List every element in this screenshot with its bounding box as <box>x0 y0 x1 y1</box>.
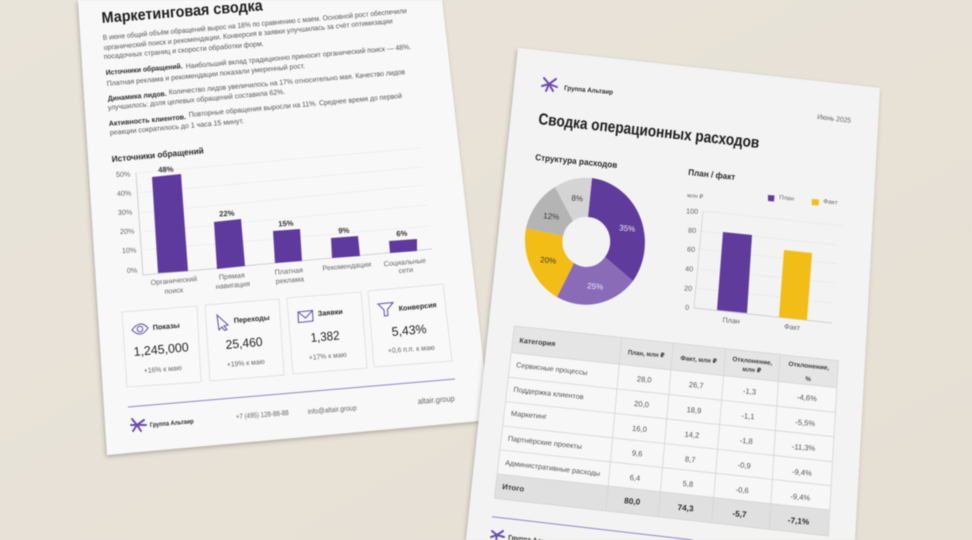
panel: marketing summary sheet <box>78 0 490 455</box>
chart heading: plan vs fact: План / факт <box>688 167 736 182</box>
bar chart: sources of requests: 40% <box>117 188 132 198</box>
bar chart: sources of requests: Социальные <box>383 256 426 268</box>
text block: summary paragraphs: посадочных страниц и скорости обработки форм. <box>103 39 264 61</box>
table: expense breakdown: % <box>805 376 812 383</box>
text block: summary paragraphs: Источники обращений. <box>105 61 183 77</box>
card: conversion: +0,6 п.п. к маю <box>388 343 436 355</box>
bar chart: sources of requests: 10% <box>122 245 137 255</box>
logo: Altair group: Группа Альтаир <box>564 85 613 96</box>
bar chart: sources of requests: 22% <box>219 208 235 219</box>
bar chart: sources of requests: реклама <box>275 274 304 286</box>
table: expense breakdown: Факт, млн ₽ <box>680 355 718 365</box>
text block: summary paragraphs: Наибольший вклад традиционно приносит органический поиск — 48%. <box>185 42 411 70</box>
text block: summary paragraphs: Повторные обращения выросли на 11%. Среднее время до первой <box>188 91 402 119</box>
text block: summary paragraphs <box>102 6 411 137</box>
legend: Факт <box>823 199 838 207</box>
bar chart: plan vs fact: 80 <box>688 226 696 235</box>
text block: summary paragraphs: Активность клиентов. <box>108 112 186 128</box>
text block: summary paragraphs: улучшилось: доля целевых обращений составила 62%. <box>107 87 285 112</box>
table: expense breakdown: 6,4 <box>629 473 641 483</box>
bar chart: plan vs fact: 60 <box>687 245 695 254</box>
bar chart: plan vs fact: 0 <box>685 303 689 312</box>
date: Июнь 2025 <box>817 112 852 125</box>
table: expense breakdown: -1,1 <box>741 411 755 421</box>
card: impressions: +16% к маю <box>143 363 183 375</box>
text block: summary paragraphs: Платная реклама и рекомендации показали умеренный рост. <box>106 61 305 88</box>
card: applications: +17% к маю <box>308 350 348 362</box>
bar chart: sources of requests: 50% <box>116 169 131 179</box>
legend: План <box>779 195 794 203</box>
table: expense breakdown: 5,8 <box>682 479 694 489</box>
heading: operating expenses: Сводка операционных расходов <box>538 111 760 152</box>
table: expense breakdown: Отклонение, <box>732 356 773 367</box>
table: expense breakdown: Категория <box>519 336 556 348</box>
icon: logo <box>131 419 146 431</box>
table: expense breakdown: Итого <box>502 482 525 494</box>
bar chart: sources of requests: поиск <box>164 285 184 296</box>
table: expense breakdown: 16,0 <box>632 424 647 434</box>
table: expense breakdown: 26,7 <box>688 380 704 390</box>
table: expense breakdown: -1,3 <box>743 386 756 397</box>
footer: marketing sheet: Группа Альтаир <box>150 418 194 429</box>
bar chart: sources of requests: Платная <box>274 265 303 277</box>
icon: envelope <box>298 310 313 322</box>
footer: expense sheet logo <box>491 531 560 540</box>
table: expense breakdown: 9,6 <box>632 449 643 458</box>
bar chart: sources of requests: 0% <box>127 266 138 275</box>
text block: summary paragraphs: В июне общий объём обращений вырос на 18% по сравнению с маем. Основной рост обеспечили <box>102 6 407 42</box>
text block: summary paragraphs: реакции сократилось до 1 часа 15 минут. <box>109 116 244 137</box>
bar chart: sources of requests: Органический <box>150 274 197 287</box>
bar chart: sources of requests <box>116 148 432 296</box>
bar chart: plan vs fact: Факт <box>784 322 801 332</box>
card: clicks: 25,460 <box>225 335 263 352</box>
table: expense breakdown: Сервисные процессы <box>516 360 588 377</box>
table: expense breakdown: План, млн ₽ <box>628 349 665 360</box>
table: expense breakdown: -5,7 <box>732 509 747 519</box>
table: expense breakdown: -9,4% <box>790 492 811 503</box>
card: clicks <box>205 299 284 381</box>
icon: eye <box>132 324 148 334</box>
table: expense breakdown: 20,0 <box>634 399 649 409</box>
bar chart: sources of requests: 20% <box>120 226 135 236</box>
table: expense breakdown: -7,1% <box>787 516 810 527</box>
legend <box>768 195 838 207</box>
bar chart: sources of requests: Прямая <box>219 270 245 282</box>
table: expense breakdown: -0,6 <box>735 485 749 495</box>
table: expense breakdown: 80,0 <box>624 496 641 507</box>
bar chart: plan vs fact: 100 <box>686 206 698 216</box>
chart heading: cost structure: Структура расходов <box>535 152 618 170</box>
icon: funnel <box>378 302 393 316</box>
table: expense breakdown: -0,9 <box>737 460 751 471</box>
card: conversion <box>368 284 452 367</box>
bar chart: plan vs fact: млн ₽ <box>687 193 704 200</box>
table: expense breakdown: Административные расходы <box>505 458 601 478</box>
text block: summary paragraphs: Количество лидов увеличилось на 17% относительно мая. Качество лидов <box>168 67 405 96</box>
table: expense breakdown: -4,6% <box>797 393 817 403</box>
text block: summary paragraphs: Динамика лидов. <box>107 89 167 103</box>
donut chart: cost structure <box>525 178 645 305</box>
bar chart: sources of requests: 15% <box>278 218 294 229</box>
icon: cursor <box>217 315 228 330</box>
bar chart: sources of requests: 48% <box>158 164 174 175</box>
table: expense breakdown: -1,8 <box>739 436 753 446</box>
card: applications <box>287 292 367 374</box>
card: applications: 1,382 <box>310 329 340 345</box>
table: expense breakdown: -9,4% <box>792 467 812 478</box>
donut chart: cost structure: 20% <box>540 255 557 266</box>
bar chart: sources of requests: 30% <box>118 207 133 217</box>
footer: marketing sheet: +7 (495) 128-88-88 <box>235 408 289 421</box>
bar chart: plan vs fact: 40 <box>685 264 693 273</box>
bar chart: sources of requests: Рекомендации <box>322 259 372 273</box>
bar chart: plan vs fact: 20 <box>684 284 692 293</box>
card: clicks: Переходы <box>233 313 270 325</box>
table: expense breakdown: 8,7 <box>685 455 696 464</box>
card: applications: Заявки <box>317 307 343 318</box>
table: expense breakdown: 14,2 <box>684 430 700 440</box>
bar chart: plan vs fact <box>684 193 843 332</box>
bar chart: plan vs fact: План <box>722 315 740 326</box>
card: conversion: Конверсия <box>398 300 437 313</box>
card: impressions <box>122 306 201 387</box>
table: expense breakdown: Партнёрские проекты <box>507 434 583 451</box>
card: clicks: +19% к маю <box>226 357 266 369</box>
donut chart: cost structure: 25% <box>587 281 604 292</box>
bar chart: sources of requests: 9% <box>338 226 350 235</box>
footer: marketing sheet <box>131 394 456 431</box>
chart heading: sources: Источники обращений <box>111 145 204 164</box>
table: expense breakdown: -5,5% <box>795 418 816 428</box>
donut chart: cost structure: 8% <box>571 194 583 203</box>
table: expense breakdown: Маркетинг <box>511 409 548 421</box>
bar chart: sources of requests: сети <box>398 265 413 275</box>
table: expense breakdown: Поддержка клиентов <box>513 385 584 401</box>
bar chart: sources of requests: навигация <box>215 279 250 291</box>
table: expense breakdown: 18,9 <box>686 405 702 415</box>
table: expense breakdown: 28,0 <box>636 374 652 385</box>
table: expense breakdown <box>494 326 838 536</box>
table: expense breakdown: Отклонение, <box>788 361 830 372</box>
card: conversion: 5,43% <box>391 322 427 339</box>
donut chart: cost structure: 12% <box>543 211 560 222</box>
table: expense breakdown: -11,3% <box>791 442 816 453</box>
footer: marketing sheet: altair.group <box>417 394 456 406</box>
logo: Altair group <box>542 78 613 96</box>
panel: operating expense sheet <box>466 48 880 540</box>
table: expense breakdown: млн ₽ <box>742 366 762 375</box>
footer: marketing sheet: info@altair.group <box>307 403 357 416</box>
card: impressions: 1,245,000 <box>133 340 189 359</box>
table: expense breakdown: 74,3 <box>677 503 694 513</box>
donut chart: cost structure: 35% <box>619 223 636 234</box>
bar chart: sources of requests: 6% <box>396 229 408 238</box>
card: impressions: Показы <box>152 321 180 332</box>
text block: summary paragraphs: органический поиск и рекомендации. Конверсия в заявки улучшилась за счёт оптимизации <box>103 16 393 52</box>
